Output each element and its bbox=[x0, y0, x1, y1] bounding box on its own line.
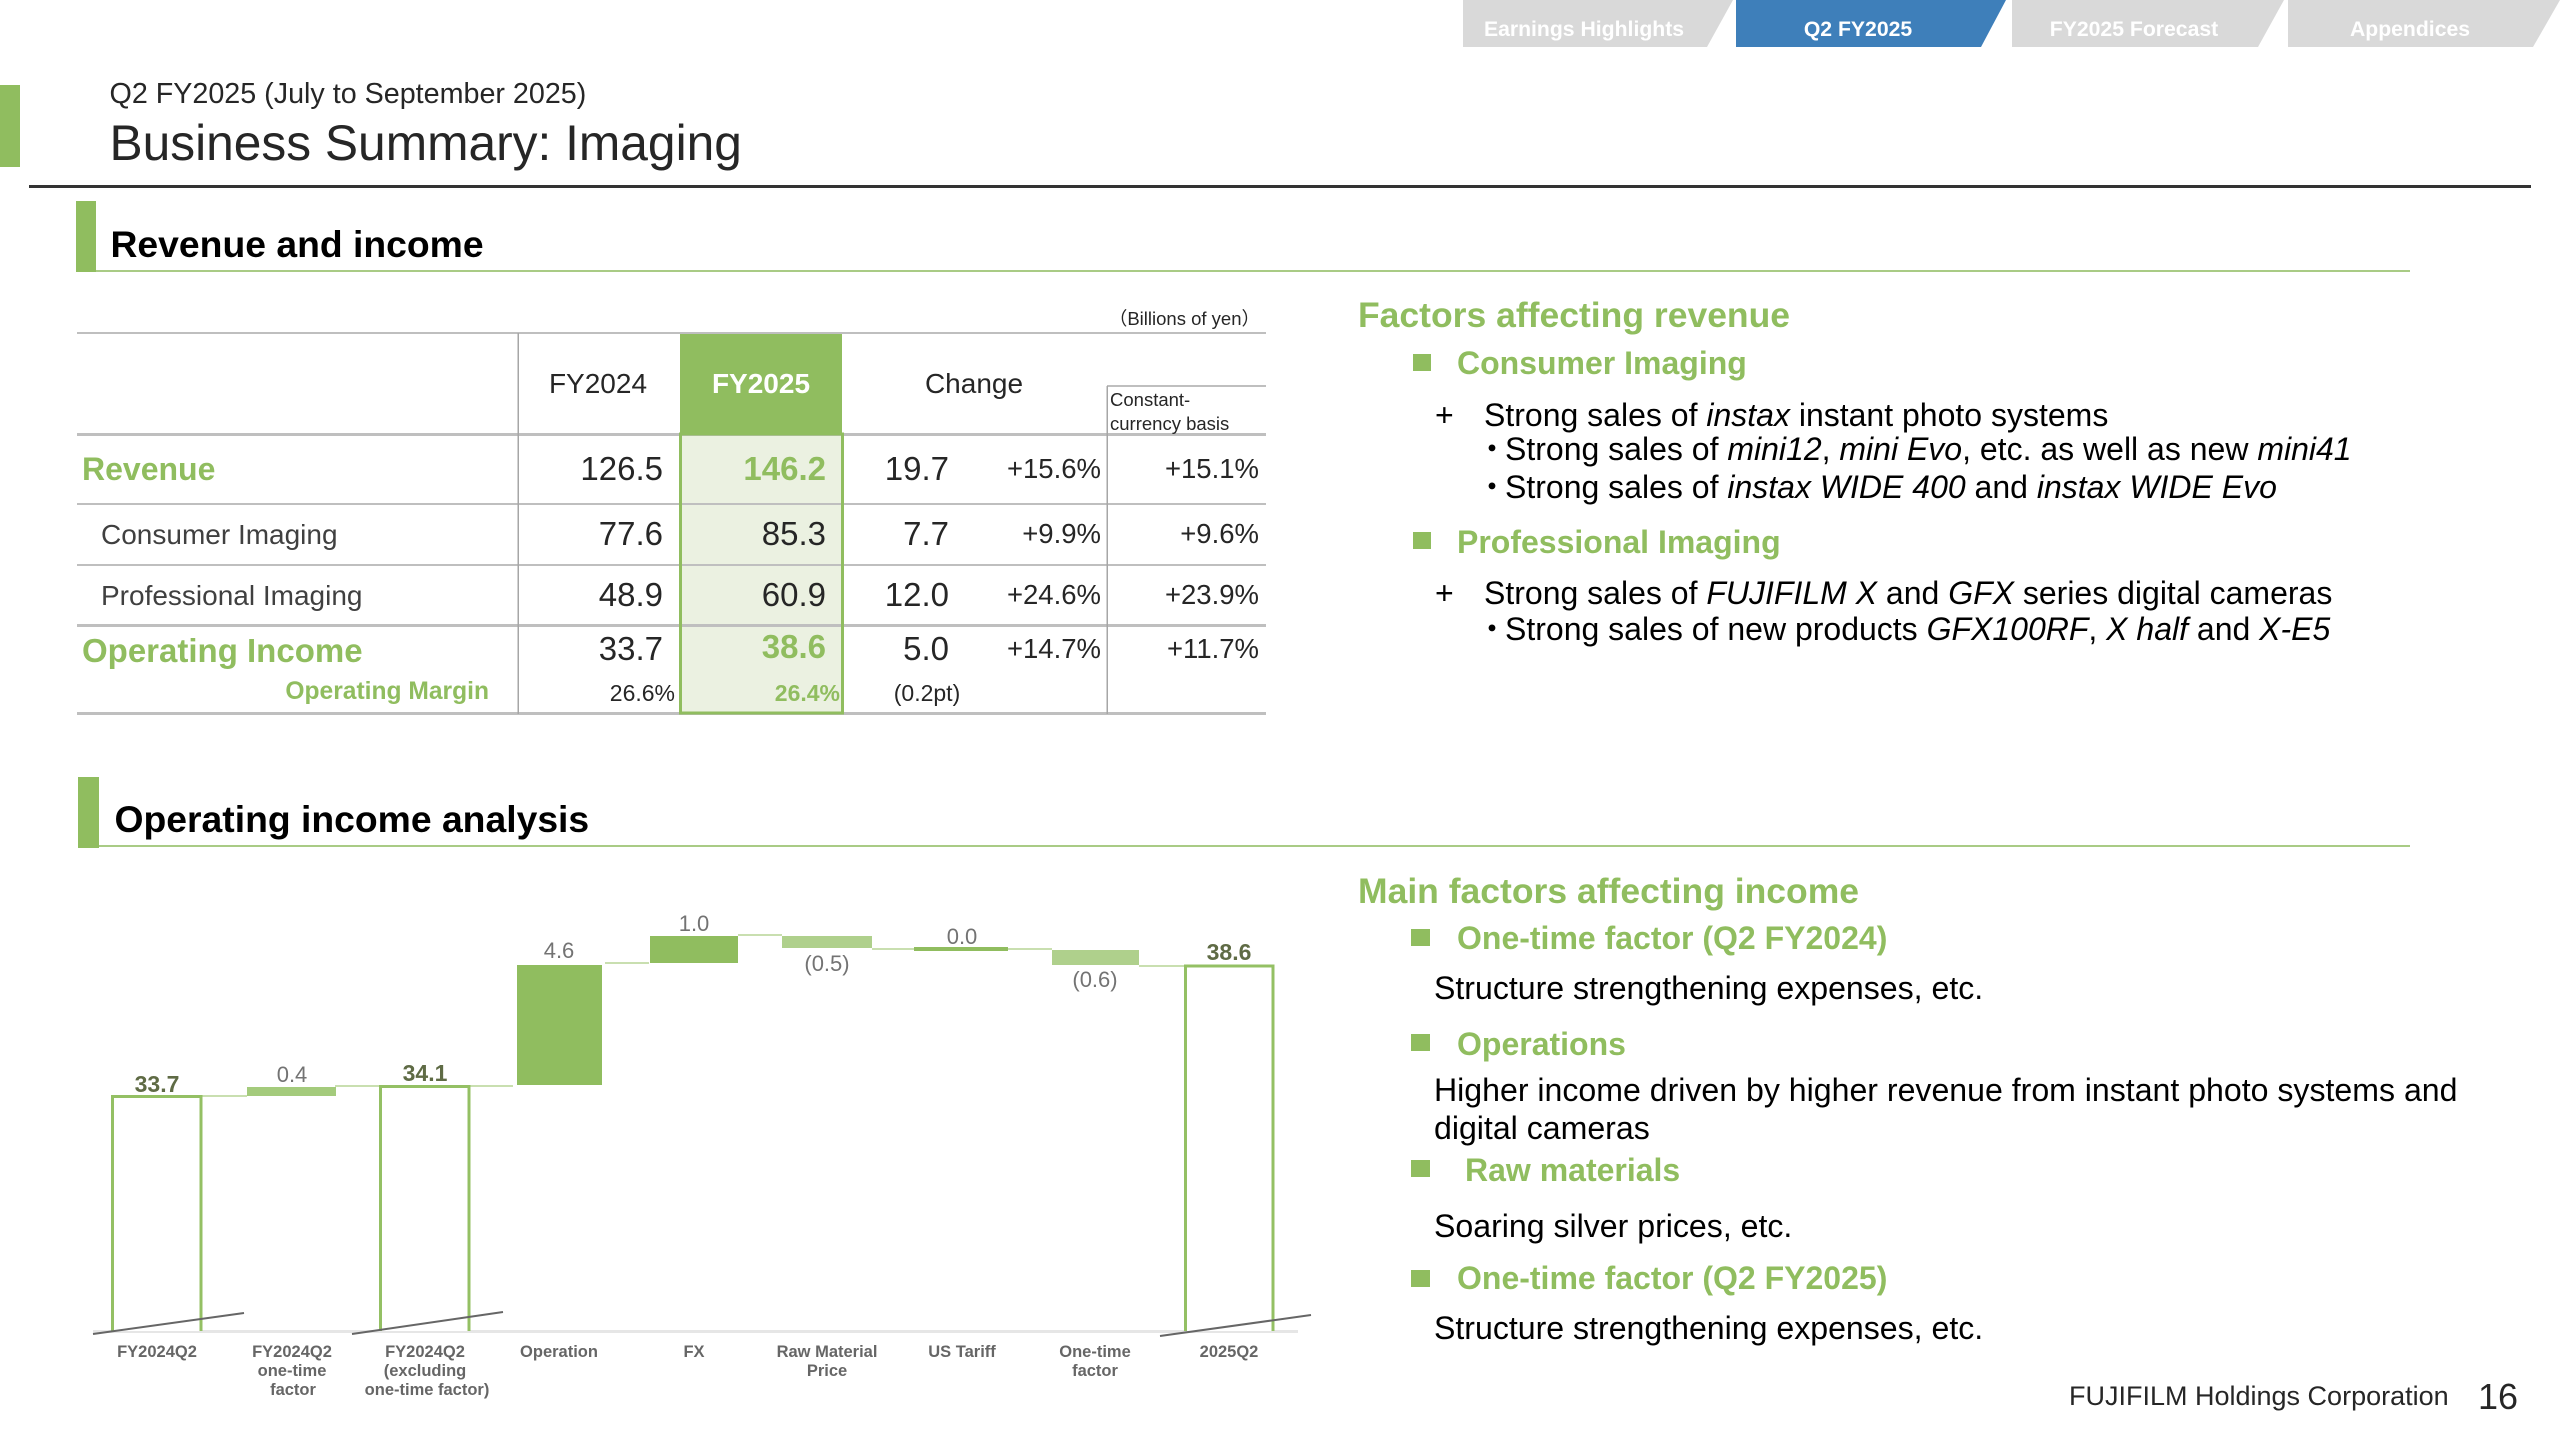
page title bbox=[110, 78, 742, 171]
professional imaging factors: + bbox=[1435, 575, 1454, 611]
table header: FY2024 bbox=[549, 368, 647, 399]
consumer imaging factors: Strong sales of instax WIDE 400 and instax WIDE Evo bbox=[1505, 469, 2277, 505]
factor: one-time Q2 FY2024: One-time factor (Q2 FY2024) bbox=[1457, 920, 1887, 956]
category labels: Raw Material bbox=[777, 1343, 877, 1361]
category labels: one-time bbox=[258, 1362, 326, 1380]
category labels: Price bbox=[807, 1362, 847, 1380]
factor: raw materials bbox=[1411, 1152, 1792, 1244]
row: consumer imaging: +9.9% bbox=[1022, 518, 1101, 549]
row: consumer imaging: +9.6% bbox=[1180, 518, 1259, 549]
row: revenue: Revenue bbox=[82, 451, 215, 487]
row: operating margin: (0.2pt) bbox=[894, 680, 960, 706]
row: consumer imaging: 77.6 bbox=[599, 515, 663, 552]
waterfall chart bbox=[93, 911, 1311, 1399]
row: operating income: +14.7% bbox=[1007, 633, 1101, 664]
professional imaging factors: Strong sales of FUJIFILM X and GFX series digital cameras bbox=[1484, 575, 2332, 611]
table header: currency basis bbox=[1110, 413, 1229, 434]
category labels: FY2024Q2 bbox=[117, 1343, 197, 1361]
bar: one-time factor -0.6: (0.6) bbox=[1072, 967, 1118, 992]
row: operating margin: Operating Margin bbox=[285, 678, 489, 705]
section heading: operating income analysis: Operating income analysis bbox=[114, 798, 589, 840]
consumer imaging factors: ・ bbox=[1476, 469, 1508, 505]
row: operating income: 33.7 bbox=[599, 630, 663, 667]
category labels: one-time factor) bbox=[365, 1381, 489, 1399]
category labels: factor bbox=[1072, 1362, 1118, 1380]
category labels: 2025Q2 bbox=[1200, 1343, 1258, 1361]
row: consumer imaging: 85.3 bbox=[762, 515, 826, 552]
row: professional imaging: 60.9 bbox=[762, 576, 826, 613]
row: operating margin bbox=[285, 678, 960, 706]
consumer imaging factors: Consumer Imaging bbox=[1457, 345, 1747, 381]
main factors affecting income bbox=[1358, 871, 2457, 1346]
navigation tabs: Earnings Highlights bbox=[1484, 18, 1684, 41]
row: revenue bbox=[82, 450, 1259, 487]
professional imaging factors: Professional Imaging bbox=[1457, 524, 1781, 560]
factor: one-time Q2 FY2024: Structure strengthening expenses, etc. bbox=[1434, 970, 1983, 1006]
revenue and income table: （Billions of yen） bbox=[1109, 308, 1260, 329]
factor: raw materials: Soaring silver prices, etc. bbox=[1434, 1208, 1792, 1244]
category labels: FY2024Q2 bbox=[252, 1343, 332, 1361]
row: revenue: +15.6% bbox=[1007, 453, 1101, 484]
consumer imaging factors: Strong sales of mini12, mini Evo, etc. as well as new mini41 bbox=[1505, 431, 2352, 467]
row: professional imaging: +23.9% bbox=[1165, 579, 1259, 610]
row: operating income bbox=[82, 628, 1259, 669]
bar: operation 4.6: 4.6 bbox=[544, 938, 574, 963]
row: operating margin: 26.4% bbox=[775, 680, 840, 706]
professional imaging factors: ・ bbox=[1476, 611, 1508, 647]
category labels: One-time bbox=[1059, 1343, 1131, 1361]
row: revenue: 126.5 bbox=[580, 450, 663, 487]
bar: one-time factor 0.4 bbox=[247, 1062, 336, 1096]
navigation tabs bbox=[1463, 0, 2560, 47]
category labels bbox=[117, 1343, 1258, 1399]
factor: one-time Q2 FY2025: One-time factor (Q2 FY2025) bbox=[1457, 1260, 1887, 1296]
table header: Change bbox=[925, 368, 1023, 399]
factor: one-time Q2 FY2025: Structure strengthening expenses, etc. bbox=[1434, 1310, 1983, 1346]
category labels: factor bbox=[270, 1381, 316, 1399]
navigation tabs: FY2025 Forecast bbox=[2050, 18, 2218, 41]
factor: one-time Q2 FY2024 bbox=[1411, 920, 1983, 1006]
bar: 2025Q2: 38.6 bbox=[1207, 939, 1251, 965]
row: consumer imaging bbox=[101, 515, 1259, 552]
table header: Constant- bbox=[1110, 389, 1190, 410]
row: operating income: +11.7% bbox=[1167, 633, 1259, 664]
bar: US tariff 0.0: 0.0 bbox=[947, 924, 977, 949]
category labels: (excluding bbox=[384, 1362, 466, 1380]
bar: one-time factor -0.6 bbox=[1052, 950, 1139, 992]
bar: one-time factor 0.4: 0.4 bbox=[277, 1062, 307, 1087]
row: revenue: +15.1% bbox=[1165, 453, 1259, 484]
category labels: FY2024Q2 bbox=[385, 1343, 465, 1361]
table header bbox=[549, 368, 1229, 434]
row: professional imaging bbox=[101, 576, 1259, 613]
connectors bbox=[202, 934, 1184, 1097]
consumer imaging factors bbox=[1413, 345, 2352, 505]
category labels: US Tariff bbox=[928, 1343, 996, 1361]
professional imaging factors: Strong sales of new products GFX100RF, X half and X-E5 bbox=[1505, 611, 2331, 647]
bar: FX 1.0: 1.0 bbox=[679, 911, 709, 936]
bar: 2025Q2 bbox=[1186, 939, 1273, 1331]
page number: 16 bbox=[2478, 1376, 2518, 1417]
bar: raw material price -0.5 bbox=[782, 936, 872, 976]
page title: Business Summary: Imaging bbox=[110, 115, 742, 171]
bar: FY2024Q2 excluding one-time factor: 34.1 bbox=[403, 1060, 448, 1086]
navigation tabs: Q2 FY2025 bbox=[1804, 18, 1912, 41]
factors affecting revenue bbox=[1358, 295, 2352, 647]
navigation tabs: Appendices bbox=[2350, 18, 2470, 41]
bar: FY2024Q2: 33.7 bbox=[135, 1071, 179, 1097]
factor: raw materials: Raw materials bbox=[1465, 1152, 1680, 1188]
page title: Q2 FY2025 (July to September 2025) bbox=[110, 78, 586, 110]
row: revenue: 146.2 bbox=[743, 450, 826, 487]
row: professional imaging: 12.0 bbox=[885, 576, 949, 613]
consumer imaging factors: ・ bbox=[1476, 431, 1508, 467]
section heading: revenue and income bbox=[76, 201, 2410, 272]
category labels: Operation bbox=[520, 1343, 598, 1361]
table header: FY2025 bbox=[712, 368, 810, 399]
professional imaging factors bbox=[1413, 524, 2332, 647]
factor: operations bbox=[1411, 1026, 2457, 1146]
section heading: revenue and income: Revenue and income bbox=[110, 223, 484, 265]
row: professional imaging: +24.6% bbox=[1007, 579, 1101, 610]
section heading: operating income analysis bbox=[78, 777, 2410, 848]
row: operating income: Operating Income bbox=[82, 632, 363, 669]
factors affecting revenue: Factors affecting revenue bbox=[1358, 295, 1790, 335]
bar: FY2024Q2 excluding one-time factor bbox=[380, 1060, 469, 1331]
category labels: FX bbox=[683, 1343, 705, 1361]
factor: one-time Q2 FY2025 bbox=[1411, 1260, 1983, 1346]
main factors affecting income: Main factors affecting income bbox=[1358, 871, 1859, 911]
consumer imaging factors: + bbox=[1435, 397, 1454, 433]
row: professional imaging: Professional Imaging bbox=[101, 580, 362, 611]
row: revenue: 19.7 bbox=[885, 450, 949, 487]
row: professional imaging: 48.9 bbox=[599, 576, 663, 613]
factor: operations: Higher income driven by higher revenue from instant photo systems and bbox=[1434, 1072, 2457, 1108]
footer company name: FUJIFILM Holdings Corporation bbox=[2069, 1381, 2449, 1411]
row: operating income: 38.6 bbox=[762, 628, 826, 665]
bar: operation 4.6 bbox=[517, 938, 602, 1085]
revenue and income table bbox=[77, 308, 1266, 715]
factor: operations: Operations bbox=[1457, 1026, 1626, 1062]
page accent block bbox=[0, 85, 20, 167]
bar: US tariff 0.0 bbox=[914, 924, 1008, 951]
consumer imaging factors: Strong sales of instax instant photo systems bbox=[1484, 397, 2108, 433]
row: operating margin: 26.6% bbox=[610, 680, 675, 706]
factor: operations: digital cameras bbox=[1434, 1110, 1650, 1146]
row: consumer imaging: 7.7 bbox=[903, 515, 949, 552]
bar: raw material price -0.5: (0.5) bbox=[804, 951, 850, 976]
bar: FX 1.0 bbox=[650, 911, 738, 963]
bar: FY2024Q2 bbox=[112, 1071, 201, 1331]
row: consumer imaging: Consumer Imaging bbox=[101, 519, 338, 550]
row: operating income: 5.0 bbox=[903, 630, 949, 667]
axis break marks bbox=[93, 1312, 1311, 1336]
